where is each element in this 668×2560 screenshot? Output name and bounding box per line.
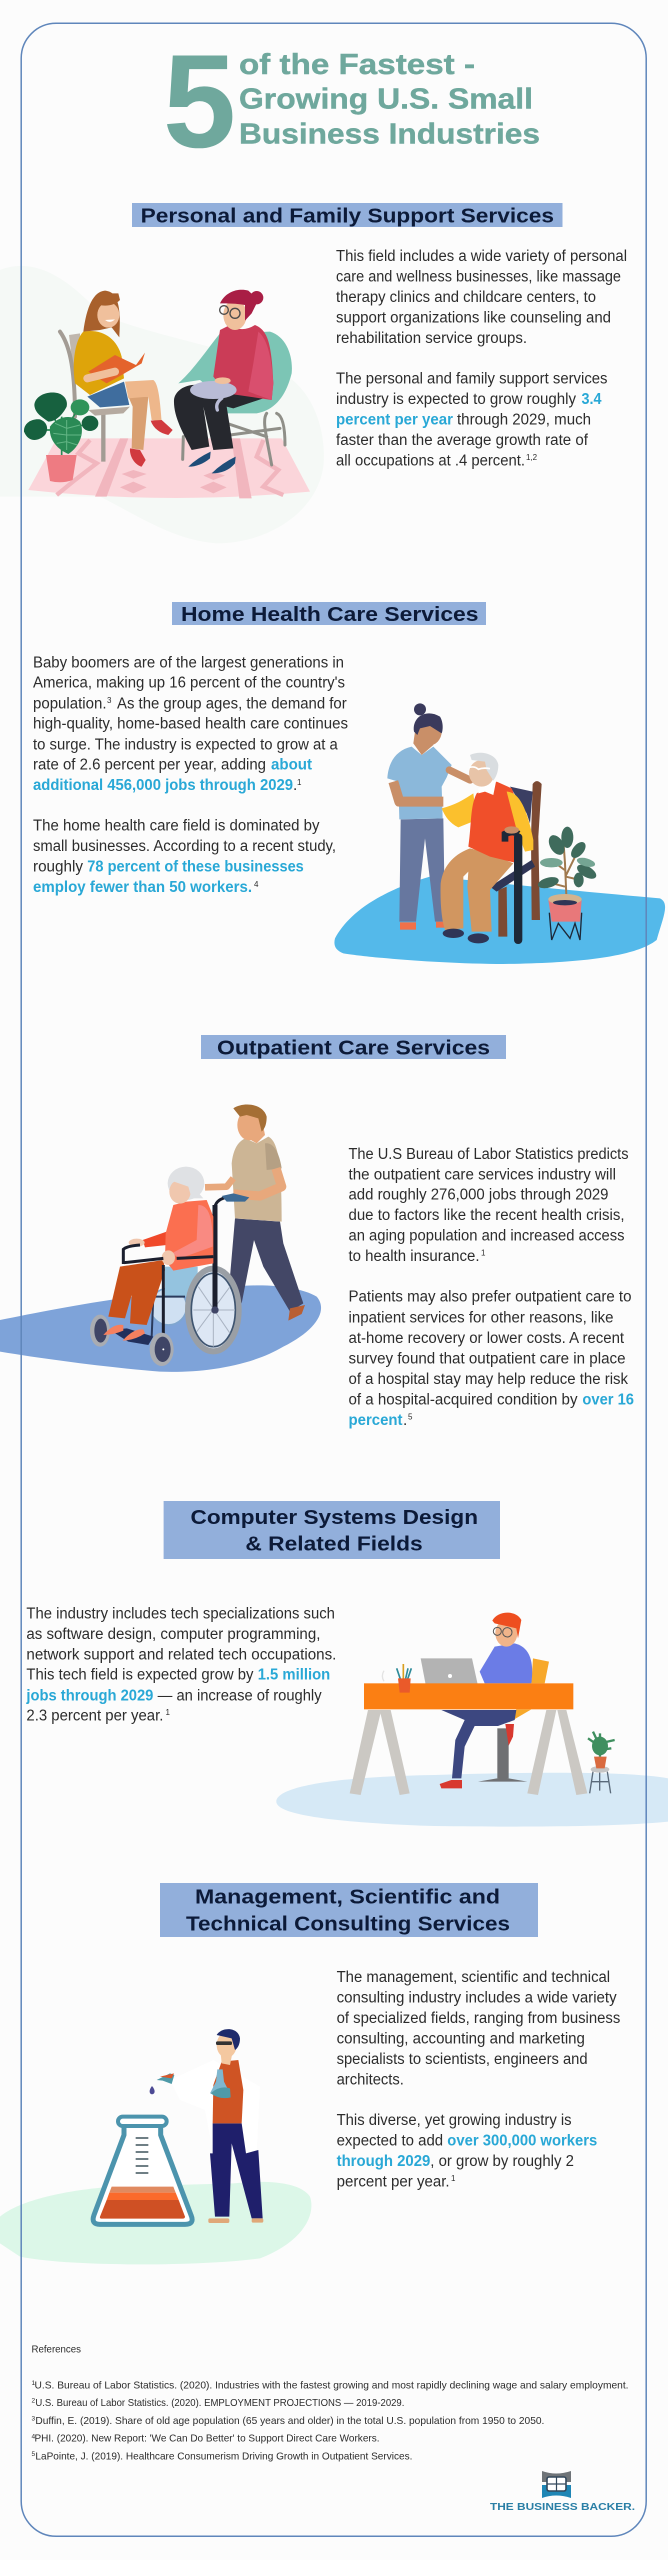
heading: management, scientific and technical consulting services xyxy=(160,1883,538,1937)
text block: computer systems: This tech field is expected grow by xyxy=(26,1667,254,1684)
text block: computer systems: — an increase of roughly xyxy=(158,1687,322,1704)
text block: management and consulting: , or grow by roughly 2 xyxy=(430,2153,574,2170)
references: 1 xyxy=(32,2380,36,2387)
text block: home health care: America, making up 16 percent of the country's xyxy=(33,675,345,692)
text block: management and consulting: over 300,000 workers xyxy=(447,2133,597,2150)
heading: computer systems design and related fields xyxy=(164,1501,500,1559)
text block: outpatient care: of a hospital stay may help reduce the risk xyxy=(348,1371,628,1388)
text block: management and consulting: consulting industry includes a wide variety xyxy=(337,1989,617,2006)
text block: home health care: population. xyxy=(33,695,106,712)
text block: personal and family support: percent per year xyxy=(336,412,453,429)
text block: computer systems xyxy=(25,1605,336,1725)
title: 5 xyxy=(163,28,236,176)
text block: home health care: rate of 2.6 percent per year, adding xyxy=(33,757,266,774)
references: Duffin, E. (2019). Share of old age population (65 years and older) in the total U.S. population from 1950 to 2050. xyxy=(35,2415,544,2427)
heading: outpatient care services: Outpatient Care Services xyxy=(217,1037,490,1060)
text block: home health care: about xyxy=(271,757,312,774)
references: 4 xyxy=(32,2433,36,2440)
text block: home health care: additional 456,000 jobs through 2029 xyxy=(33,777,293,794)
text block: personal and family support xyxy=(336,248,627,470)
text block: personal and family support: faster than the average growth rate of xyxy=(336,432,589,449)
references: LaPointe, J. (2019). Healthcare Consumerism Driving Growth in Outpatient Services. xyxy=(35,2450,412,2462)
illustration: nurse caring for elderly man xyxy=(334,703,665,964)
text block: outpatient care: inpatient services for other reasons, like xyxy=(348,1309,614,1326)
text block: personal and family support: 3.4 xyxy=(582,391,602,408)
text block: personal and family support: all occupations at .4 percent. xyxy=(336,453,525,470)
references: 2 xyxy=(32,2398,36,2405)
text block: personal and family support: therapy clinics and childcare centers, to xyxy=(336,289,596,306)
title: Growing U.S. Small xyxy=(239,84,533,116)
text block: management and consulting: of specialized fields, ranging from business xyxy=(337,2010,621,2027)
illustration: man working on a laptop at a desk xyxy=(276,1613,668,1827)
text block: computer systems: network support and related tech occupations. xyxy=(26,1646,336,1663)
text block: home health care xyxy=(33,654,348,896)
text block: personal and family support: industry is expected to grow roughly xyxy=(336,391,576,408)
text block: outpatient care: due to factors like the recent health crisis, xyxy=(348,1207,624,1224)
references: References xyxy=(32,2343,81,2355)
text block: home health care: 1 xyxy=(297,778,302,787)
title: of the Fastest - xyxy=(239,49,475,81)
text block: home health care: . xyxy=(293,777,297,794)
text block: outpatient care: to health insurance. xyxy=(348,1248,480,1265)
text block: home health care: 78 percent of these businesses xyxy=(87,859,304,876)
logo: the business backer xyxy=(490,2471,635,2513)
text block: outpatient care: at-home recovery or lower costs. A recent xyxy=(348,1330,625,1347)
text block: computer systems: 2.3 percent per year. xyxy=(26,1708,163,1725)
text block: home health care: employ fewer than 50 workers. xyxy=(33,879,252,896)
text block: home health care: roughly xyxy=(33,859,83,876)
text block: management and consulting: This diverse, yet growing industry is xyxy=(337,2112,572,2129)
text block: personal and family support: The personal and family support services xyxy=(336,371,608,388)
illustration: two women talking on a rug xyxy=(0,266,324,543)
references: PHI. (2020). New Report: 'We Can Do Better' to Support Direct Care Workers. xyxy=(34,2433,380,2445)
text block: outpatient care: the outpatient care services industry will xyxy=(348,1166,616,1183)
heading: management, scientific and technical consulting services: Management, Scientific and xyxy=(195,1886,500,1909)
text block: outpatient care: 5 xyxy=(408,1412,413,1422)
text block: home health care: 4 xyxy=(254,880,259,889)
text block: personal and family support: rehabilitation service groups. xyxy=(336,330,527,347)
text block: outpatient care: an aging population and increased access xyxy=(348,1228,625,1245)
text block: outpatient care: The U.S Bureau of Labor Statistics predicts xyxy=(348,1146,629,1163)
text block: home health care: Baby boomers are of the largest generations in xyxy=(33,654,344,671)
text block: home health care: 3 xyxy=(107,696,112,705)
text block: management and consulting: percent per year. xyxy=(337,2174,450,2191)
text block: management and consulting: The management, scientific and technical xyxy=(337,1969,610,1986)
text block: home health care: high-quality, home-based health care continues xyxy=(33,716,348,733)
references: 3 xyxy=(32,2416,36,2423)
text block: outpatient care: Patients may also prefer outpatient care to xyxy=(348,1289,632,1306)
heading: home health care services: Home Health Care Services xyxy=(181,603,478,626)
title: Business Industries xyxy=(239,118,540,150)
text block: computer systems: as software design, computer programming, xyxy=(26,1626,320,1643)
text block: outpatient care: percent xyxy=(348,1412,402,1429)
text block: personal and family support: through 2029, much xyxy=(457,412,591,429)
text block: outpatient care: survey found that outpatient care in place xyxy=(348,1350,626,1367)
text block: management and consulting: expected to add xyxy=(337,2133,443,2150)
text block: outpatient care: 1 xyxy=(481,1248,486,1258)
text block: management and consulting: architects. xyxy=(337,2071,404,2088)
text block: computer systems: 1.5 million xyxy=(258,1667,330,1684)
heading: management, scientific and technical consulting services: Technical Consulting Services xyxy=(186,1912,510,1935)
text block: home health care: to surge. The industry is expected to grow at a xyxy=(33,736,338,753)
text block: computer systems: jobs through 2029 xyxy=(25,1687,154,1704)
text block: outpatient care: . xyxy=(403,1412,407,1429)
references: U.S. Bureau of Labor Statistics. (2020). EMPLOYMENT PROJECTIONS — 2019-2029. xyxy=(35,2397,404,2409)
text block: management and consulting xyxy=(337,1969,621,2191)
text block: outpatient care xyxy=(348,1146,634,1429)
illustration: man pushing woman in a wheelchair xyxy=(0,1105,321,1372)
text block: computer systems: The industry includes tech specializations such xyxy=(26,1605,335,1622)
logo: the business backer: THE BUSINESS BACKER. xyxy=(490,2502,635,2513)
text block: management and consulting: 1 xyxy=(451,2174,456,2183)
references xyxy=(32,2343,628,2462)
text block: personal and family support: support organizations like counseling and xyxy=(336,310,611,326)
text block: management and consulting: specialists to scientists, engineers and xyxy=(337,2051,588,2068)
title xyxy=(163,28,540,176)
references: 5 xyxy=(32,2451,36,2458)
text block: outpatient care: over 16 xyxy=(582,1391,634,1408)
references: U.S. Bureau of Labor Statistics. (2020). Industries with the fastest growing and most rapidly declining wage and salary employment. xyxy=(34,2379,628,2391)
text block: personal and family support: 1,2 xyxy=(526,453,538,462)
text block: home health care: As the group ages, the demand for xyxy=(117,695,347,712)
text block: management and consulting: through 2029 xyxy=(337,2153,431,2170)
text block: outpatient care: of a hospital-acquired condition by xyxy=(348,1391,578,1408)
text block: personal and family support: This field includes a wide variety of personal xyxy=(336,248,627,265)
text block: home health care: The home health care field is dominated by xyxy=(33,818,320,835)
heading: computer systems design and related fields: & Related Fields xyxy=(245,1533,423,1556)
text block: personal and family support: care and wellness businesses, like massage xyxy=(336,268,621,286)
text block: outpatient care: add roughly 276,000 jobs through 2029 xyxy=(348,1187,608,1204)
text block: home health care: small businesses. According to a recent study, xyxy=(33,838,336,855)
heading: computer systems design and related fields: Computer Systems Design xyxy=(190,1506,478,1529)
heading: personal and family support services: Personal and Family Support Services xyxy=(141,205,554,228)
text block: computer systems: 1 xyxy=(166,1708,170,1717)
illustration: scientist and laboratory flask xyxy=(0,2029,311,2264)
text block: management and consulting: consulting, accounting and marketing xyxy=(337,2030,585,2047)
